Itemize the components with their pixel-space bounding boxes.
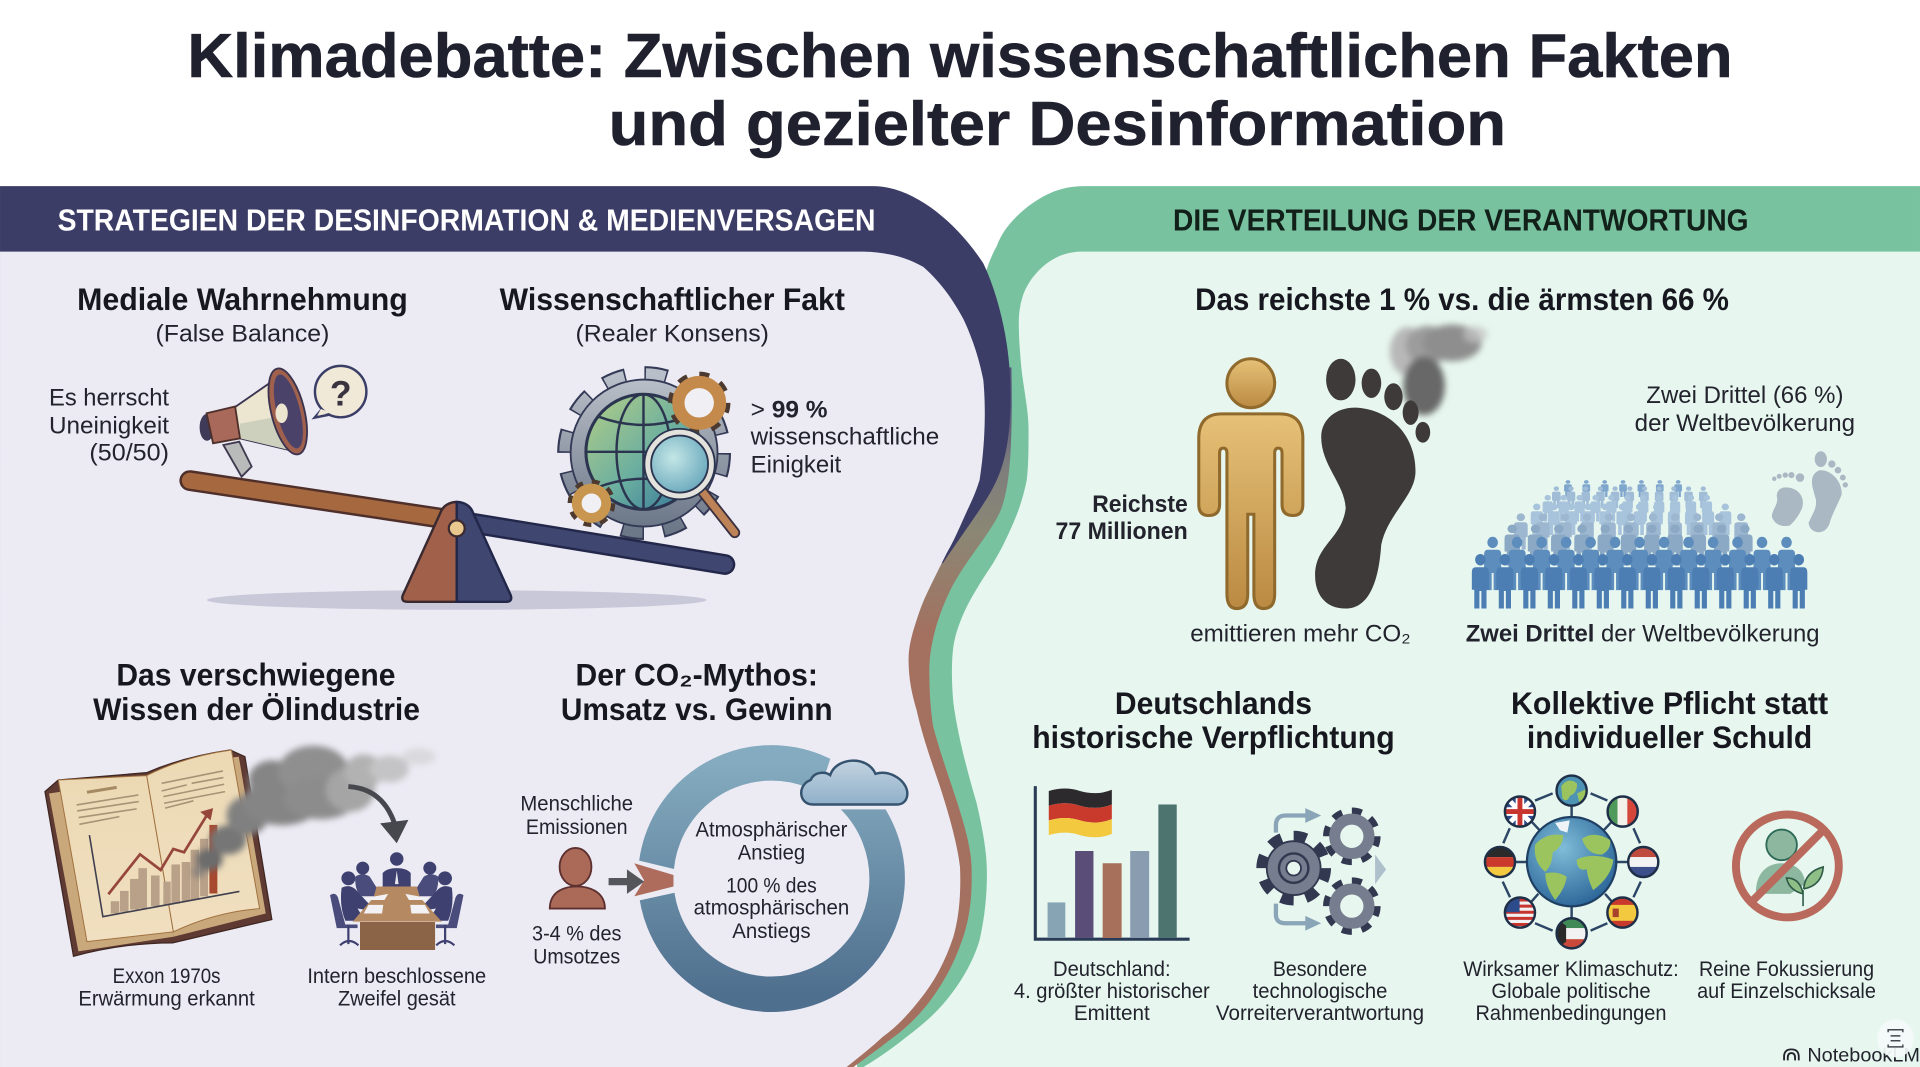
text: zwei drittel der weltbevoelkerung: Zwei Drittel der Weltbevölkerung (1466, 621, 1820, 648)
icon: seesaw (190, 481, 725, 610)
header: left: STRATEGIEN DER DESINFORMATION & MEDIENVERSAGEN (58, 204, 876, 238)
text: 99 prozent (750, 397, 939, 479)
text: reichste 77 millionen (1056, 491, 1188, 545)
heading: deutschlands verpflichtung: Deutschlands (1115, 685, 1312, 721)
text: vorreiterverantwortung: Vorreiterverantwortung (1216, 1001, 1424, 1025)
icon: open book with chart (45, 750, 272, 956)
icon: flag usa (1506, 898, 1534, 926)
heading: das verschwiegene wissen: Das verschwiegene (116, 657, 396, 693)
heading: kollektive pflicht: Kollektive Pflicht statt (1511, 685, 1829, 721)
heading: wissenschaftlicher fakt: (Realer Konsens) (576, 321, 769, 348)
text: 3-4 prozent: Umsotzes (533, 945, 620, 969)
icon: flag italy (1608, 798, 1636, 825)
icon: gold person (1199, 359, 1303, 609)
icon: question bubble (315, 366, 366, 418)
heading: co2 mythos: Umsatz vs. Gewinn (561, 691, 833, 727)
text: exxon (78, 964, 255, 1010)
heading: deutschlands verpflichtung (1032, 685, 1395, 755)
text: 99 prozent: wissenschaftliche (750, 423, 939, 450)
text: uneinigkeit (49, 384, 169, 466)
text: deutschland emittent: Deutschland: (1053, 957, 1171, 981)
chart: crowd of people (1472, 480, 1807, 609)
text: atmosphaerischer anstieg: 100 % des (726, 874, 817, 898)
icon: no individual blame (1736, 815, 1839, 917)
heading: mediale wahrnehmung: Mediale Wahrnehmung (77, 281, 408, 317)
text: deutschland emittent: 4. größter historischer (1014, 979, 1210, 1003)
text: deutschland emittent (1014, 957, 1210, 1025)
heading: das verschwiegene wissen: Wissen der Ölindustrie (93, 691, 420, 727)
text: wirksamer klimaschutz: Wirksamer Klimaschutz: (1463, 957, 1679, 981)
icon: person emissions (550, 848, 605, 909)
text: menschliche emissionen: Menschliche (520, 792, 633, 816)
arrow: smoke to meeting (348, 787, 408, 843)
icon: gears with arrows (1263, 808, 1386, 931)
text: einzelschicksale: auf Einzelschicksale (1697, 979, 1876, 1003)
text: uneinigkeit: Es herrscht (49, 384, 169, 411)
heading: mediale wahrnehmung: (False Balance) (156, 321, 329, 348)
arrow: emissions to ring (609, 869, 644, 894)
text: reichste 77 millionen: Reichste (1092, 491, 1188, 518)
icon: flag kuwait (1558, 920, 1586, 948)
text: reichste 77 millionen: 77 Millionen (1056, 518, 1188, 545)
header: right: DIE VERTEILUNG DER VERANTWORTUNG (1173, 204, 1749, 238)
text: 99 prozent: Einigkeit (751, 452, 841, 479)
text: zweifel: Intern beschlossene (307, 964, 486, 988)
text: wirksamer klimaschutz (1463, 957, 1679, 1025)
icon: german flag (1049, 789, 1112, 837)
heading: mediale wahrnehmung (77, 281, 408, 348)
text: zwei drittel 66: Zwei Drittel (66 %) (1646, 382, 1843, 409)
text: atmosphaerischer anstieg: Anstieg (738, 841, 805, 865)
icon: flag uk (1506, 798, 1534, 826)
text: zwei drittel 66: der Weltbevölkerung (1635, 410, 1855, 437)
heading: kollektive pflicht (1511, 685, 1829, 755)
text: uneinigkeit: Uneinigkeit (49, 412, 169, 439)
chart: german emissions bars (1035, 786, 1190, 939)
icon: big footprint (1315, 359, 1430, 609)
text: 3-4 prozent: 3-4 % des (532, 921, 621, 945)
chart: donut co2 (624, 741, 909, 994)
heading: co2 mythos (561, 657, 833, 727)
text: atmosphaerischer anstieg: Anstiegs (732, 919, 811, 943)
text: wirksamer klimaschutz: Rahmenbedingungen (1476, 1001, 1667, 1025)
text: exxon: Exxon 1970s (113, 964, 220, 988)
title: Klimadebatte: Zwischen wissenschaftlichen Fakten (187, 21, 1733, 91)
text: atmosphaerischer anstieg: Atmosphärischer (696, 817, 847, 841)
text: einzelschicksale: Reine Fokussierung (1699, 957, 1874, 981)
text: wirksamer klimaschutz: Globale politische (1491, 979, 1651, 1003)
heading: wissenschaftlicher fakt: Wissenschaftlicher Fakt (500, 281, 845, 317)
icon: small footprints (1772, 451, 1848, 532)
text: deutschland emittent: Emittent (1074, 1001, 1150, 1025)
icon: smoke over book (192, 746, 436, 878)
heading: co2 mythos: Der CO₂-Mythos: (576, 657, 818, 693)
heading: deutschlands verpflichtung: historische Verpflichtung (1032, 719, 1395, 755)
text: vorreiterverantwortung: technologische (1253, 979, 1387, 1003)
icon: flag germany (1486, 848, 1514, 876)
watermark: notebooklm: NotebookLM (1807, 1046, 1920, 1067)
text: atmosphaerischer anstieg (694, 817, 849, 943)
icon: megaphone (200, 365, 314, 477)
panel: strategien der desinformation (left) (0, 186, 1012, 1067)
text: zweifel (307, 964, 486, 1010)
text: vorreiterverantwortung (1216, 957, 1424, 1025)
icon: floating button (1877, 1019, 1914, 1057)
icon: smoke over footprint (1390, 324, 1488, 415)
icon: gear globe magnifier (567, 376, 735, 533)
text: exxon: Erwärmung erkannt (78, 986, 255, 1010)
text: zweifel: Zweifel gesät (338, 986, 456, 1010)
text: 99 prozent: > 99 % (751, 397, 828, 424)
heading: kollektive pflicht: individueller Schuld (1527, 719, 1812, 755)
title (187, 21, 1733, 159)
icon: globe with flags (1484, 775, 1659, 949)
text: vorreiterverantwortung: Besondere (1273, 957, 1367, 981)
text: uneinigkeit: (50/50) (89, 439, 169, 466)
icon: flag spain (1608, 898, 1636, 926)
text: atmosphaerischer anstieg: atmosphärischen (694, 896, 849, 920)
heading: reichste 1 prozent: Das reichste 1 % vs. die ärmsten 66 % (1195, 281, 1729, 317)
text: 3-4 prozent (532, 921, 621, 969)
text: menschliche emissionen: Emissionen (526, 815, 628, 839)
heading: das verschwiegene wissen (93, 657, 420, 727)
icon: meeting table (330, 852, 463, 950)
icon: flag globe (1558, 776, 1586, 804)
title: und gezielter Desinformation (609, 89, 1506, 159)
text: zwei drittel 66 (1635, 382, 1855, 437)
text: emittieren mehr co2: emittieren mehr CO₂ (1190, 621, 1411, 648)
heading: wissenschaftlicher fakt (500, 281, 845, 348)
icon: question bubble: ? (330, 373, 352, 413)
text: menschliche emissionen (520, 792, 633, 839)
icon: flag netherlands (1630, 848, 1657, 876)
text: einzelschicksale (1697, 957, 1876, 1003)
icon: cloud (801, 761, 907, 804)
